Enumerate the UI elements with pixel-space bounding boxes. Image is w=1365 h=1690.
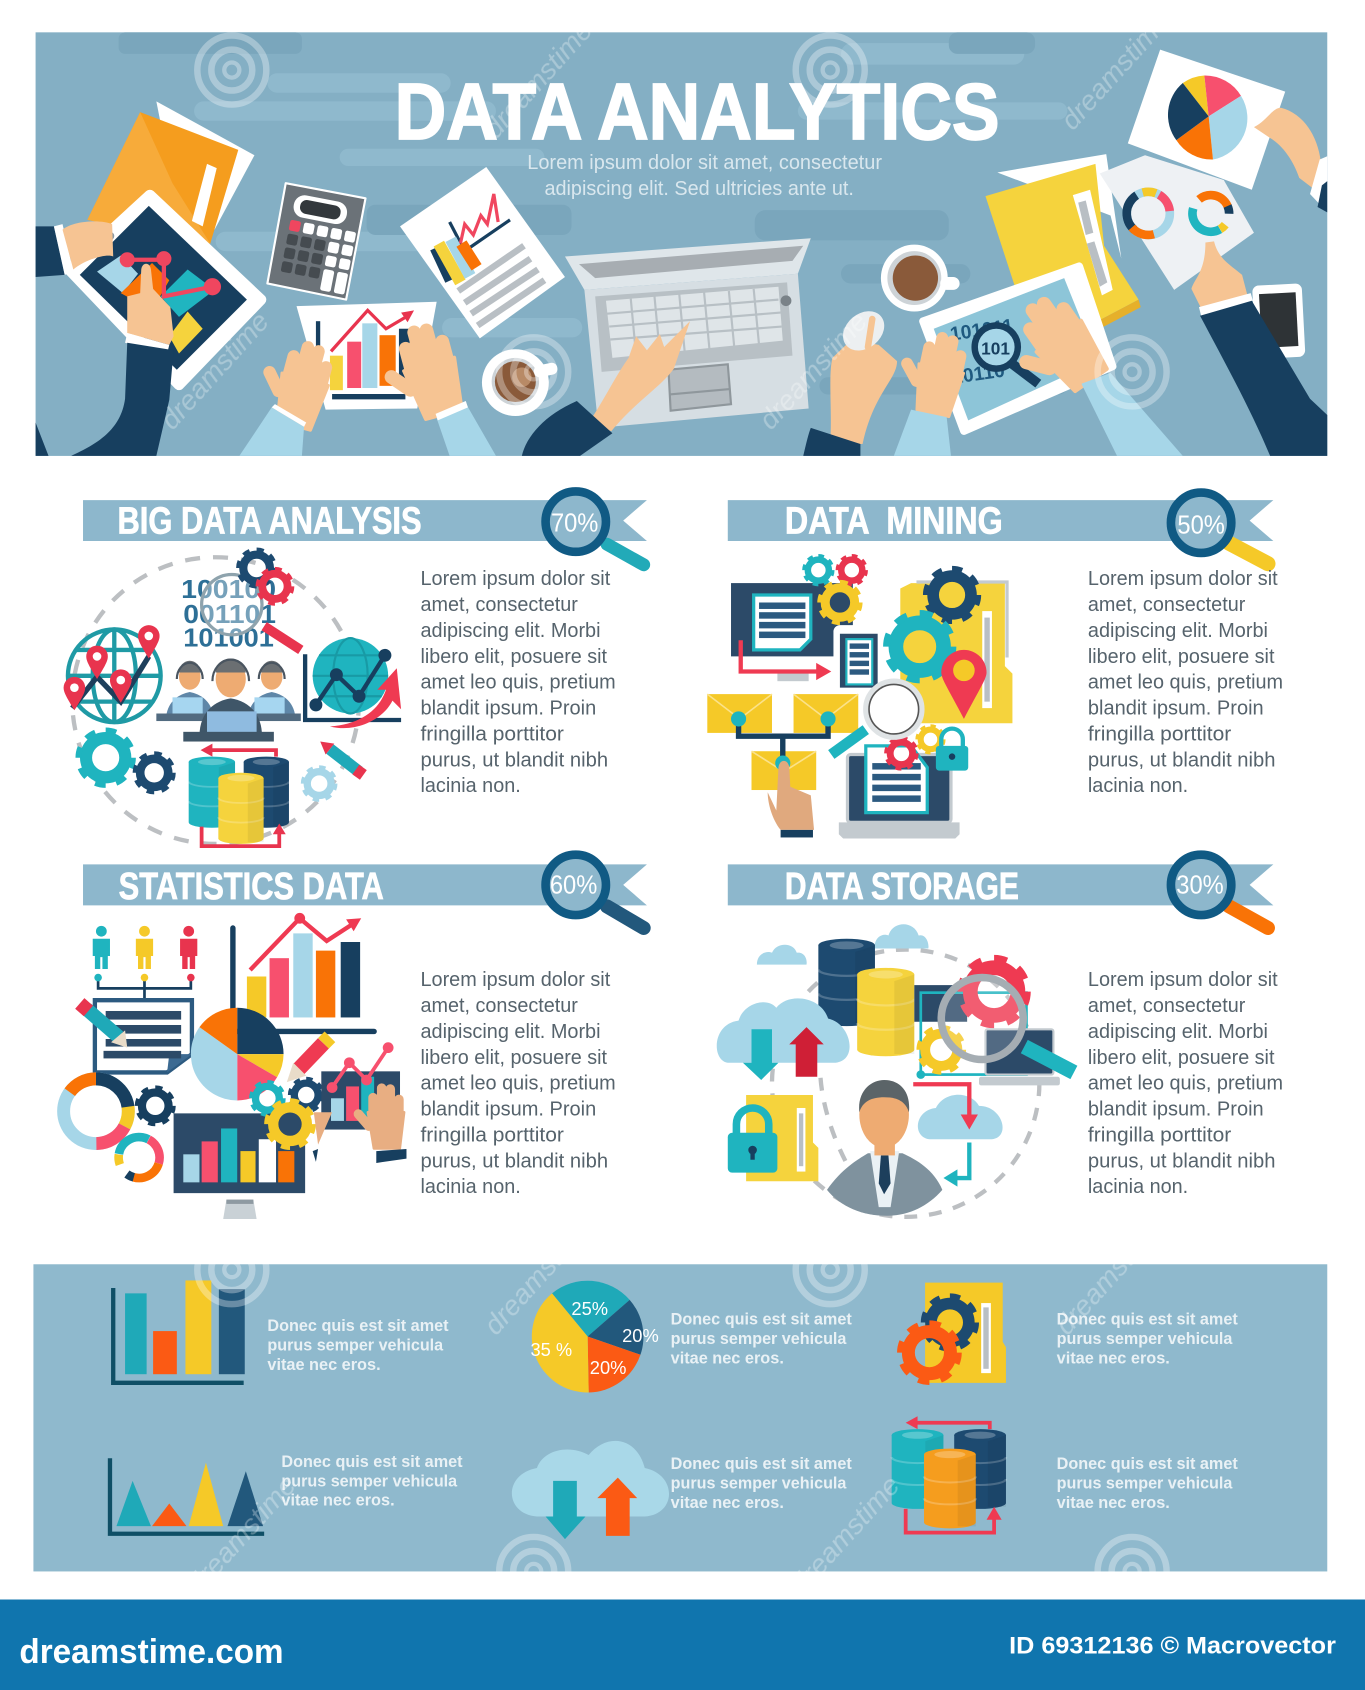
body text: data storage — [1088, 968, 1283, 1198]
panel: bottom statistics — [33, 1264, 1327, 1571]
body text: data mining: lacinia non. — [1088, 774, 1188, 797]
chart: pie with percentages: 35 % — [530, 1339, 572, 1360]
icon: red pencil — [287, 1037, 330, 1082]
illustration: data mining — [707, 556, 1012, 839]
pie chart — [191, 1008, 284, 1100]
watermark: dreamstime — [477, 15, 598, 144]
illustration: big data analysis: 100100 — [181, 576, 276, 604]
text block: triangles: purus semper vehicula — [281, 1472, 458, 1490]
icon: monitor bar chart — [174, 1113, 305, 1219]
body text: data storage: purus, ut blandit nibh — [1088, 1149, 1276, 1172]
icon: folder with gears and pin — [887, 569, 1012, 723]
body text: statistics data — [420, 968, 616, 1198]
body text: big data analysis: purus, ut blandit nibh — [420, 748, 608, 771]
panel: statistics data — [51, 855, 647, 1219]
icon: magnifier 50% — [1171, 493, 1268, 564]
icon: magnifier 70% — [546, 491, 644, 565]
icon: call centre agents — [156, 659, 301, 742]
heading ribbon: big data analysis — [83, 500, 647, 542]
panel: data storage — [717, 855, 1283, 1217]
body text: big data analysis: fringilla porttitor — [420, 722, 564, 745]
icon: donut chart paper — [1100, 155, 1254, 290]
text block: cloud — [671, 1455, 852, 1512]
icon: three people — [93, 926, 197, 1005]
icon: magnifier 50%: 50% — [1177, 512, 1225, 540]
body text: data storage: fringilla porttitor — [1088, 1123, 1231, 1146]
icon: pencil — [320, 742, 363, 775]
icon: document and pencil — [80, 1000, 192, 1072]
body text: data mining: Lorem ipsum dolor sit — [1088, 567, 1278, 590]
body text: statistics data: purus, ut blandit nibh — [420, 1149, 608, 1172]
text block: cloud: purus semper vehicula — [671, 1474, 847, 1492]
heading ribbon: data storage — [728, 864, 1273, 907]
icon: smartphone — [833, 625, 883, 705]
right hands, phone and sleeves — [1191, 108, 1327, 456]
icon: database stack — [892, 1416, 1006, 1533]
body text: data storage: Lorem ipsum dolor sit — [1088, 968, 1278, 991]
text block: pie — [671, 1311, 852, 1367]
icons: small clouds — [757, 924, 928, 965]
text block: folder — [1057, 1311, 1238, 1367]
body text: big data analysis — [420, 567, 616, 797]
icon: database stack — [189, 744, 289, 846]
icon: magnifier — [831, 681, 922, 754]
icon: right tablet and hands: 101011 — [949, 315, 1015, 346]
icon: right tablet and hands: 101 — [981, 339, 1010, 359]
icon: globe chart with red arrow — [305, 638, 401, 728]
chart: pie with percentages: 20% — [590, 1357, 626, 1378]
body text: statistics data: amet leo quis, pretium — [420, 1072, 616, 1095]
text block: bars — [267, 1317, 449, 1374]
text block: bars: vitae nec eros. — [267, 1356, 381, 1374]
watermark: dreamstime — [154, 306, 275, 435]
icon: gears and magnifier with laptop — [914, 959, 1074, 1085]
title: DATA ANALYTICS — [395, 67, 999, 156]
body text: big data analysis: blandit ipsum. Proin — [420, 697, 596, 720]
icon: laptop — [565, 238, 811, 428]
icon: magnifier 60%: 60% — [550, 872, 597, 900]
icon: folder with gears — [900, 1283, 1006, 1383]
body text: data mining — [1088, 567, 1283, 797]
footer logo text: dreamstime.com — [19, 1633, 284, 1671]
hero subtitle: Lorem ipsum dolor sit amet, consectetur — [527, 151, 882, 174]
text block: cloud: vitae nec eros. — [671, 1494, 784, 1512]
icon: bar chart paper with hands — [239, 302, 496, 456]
icon: laptop with document — [839, 726, 960, 839]
text block: database: purus semper vehicula — [1057, 1474, 1233, 1492]
icon: magnifier 30%: 30% — [1176, 872, 1224, 900]
illustration: big data analysis — [64, 550, 401, 846]
hero subtitle: adipiscing elit. Sed ultricies ante ut. — [544, 177, 854, 200]
icon: business man — [827, 1080, 942, 1216]
icon: calculator — [267, 183, 366, 300]
text block: folder: purus semper vehicula — [1057, 1330, 1233, 1348]
text block: triangles: vitae nec eros. — [281, 1492, 395, 1510]
body text: big data analysis: Lorem ipsum dolor sit — [420, 567, 611, 590]
body text: data mining: amet leo quis, pretium — [1088, 671, 1283, 694]
icon: pie chart paper — [1128, 50, 1285, 190]
illustration: data storage — [717, 924, 1074, 1217]
watermark: dreamstime — [752, 306, 873, 435]
donut charts and gear — [51, 1066, 174, 1185]
icon: envelopes — [707, 694, 858, 790]
bar chart — [233, 913, 374, 1031]
heading ribbon: statistics data: STATISTICS DATA — [119, 865, 384, 907]
heading ribbon: data mining — [728, 500, 1273, 542]
icon: pointing hand — [768, 761, 814, 837]
watermark: dreamstime — [477, 1211, 598, 1340]
body text: big data analysis: libero elit, posuere sit — [420, 645, 607, 668]
body text: data storage: adipiscing elit. Morbi — [1088, 1020, 1268, 1043]
chart: bars — [113, 1280, 245, 1383]
body text: big data analysis: adipiscing elit. Morbi — [420, 619, 601, 642]
icon: big cloud with arrows — [717, 998, 850, 1080]
icon: orange folder — [87, 101, 254, 244]
laptop hand and sleeve — [522, 321, 690, 456]
text block: folder: vitae nec eros. — [1057, 1349, 1170, 1367]
icon: report page — [400, 167, 565, 338]
icon: mouse and hand — [803, 303, 897, 456]
icon: right tablet and hands — [894, 266, 1183, 456]
body text: data storage: amet leo quis, pretium — [1088, 1072, 1283, 1095]
watermark: dreamstime — [1049, 1211, 1170, 1340]
heading ribbon: data storage: DATA STORAGE — [785, 865, 1019, 907]
body text: statistics data: blandit ipsum. Proin — [420, 1098, 596, 1121]
text block: bars: Donec quis est sit amet — [267, 1317, 449, 1335]
body text: statistics data: adipiscing elit. Morbi — [420, 1020, 601, 1043]
illustration: big data analysis: 101001 — [183, 625, 274, 653]
icon: coffee cup left — [482, 349, 558, 416]
body text: data storage: blandit ipsum. Proin — [1088, 1098, 1264, 1121]
icon: monitor with document — [731, 583, 853, 681]
text block: database — [1057, 1455, 1238, 1512]
body text: data mining: adipiscing elit. Morbi — [1088, 619, 1268, 642]
text block: pie: Donec quis est sit amet — [671, 1311, 852, 1329]
icon: globe with pins — [64, 625, 161, 722]
text block: folder: Donec quis est sit amet — [1057, 1311, 1238, 1329]
body text: statistics data: libero elit, posuere sit — [420, 1046, 607, 1069]
heading ribbon: big data analysis: BIG DATA ANALYSIS — [118, 500, 422, 542]
chart: pie with percentages: 20% — [622, 1325, 659, 1346]
body text: data mining: blandit ipsum. Proin — [1088, 697, 1264, 720]
chart: triangles — [110, 1458, 264, 1534]
left sleeves and hands — [36, 221, 174, 456]
text block: bars: purus semper vehicula — [267, 1336, 444, 1354]
text block: triangles — [281, 1453, 463, 1510]
text block: database: Donec quis est sit amet — [1057, 1455, 1238, 1473]
body text: data mining: purus, ut blandit nibh — [1088, 748, 1276, 771]
footer bar — [0, 1599, 1365, 1690]
footer credit: ID 69312136 © Macrovector — [1009, 1633, 1336, 1659]
icon: cloud with arrows — [512, 1441, 669, 1539]
heading ribbon: statistics data — [83, 864, 647, 907]
icon: coffee cup right — [881, 245, 960, 311]
icon: magnifier 30% — [1171, 855, 1268, 928]
body text: statistics data: lacinia non. — [420, 1175, 521, 1198]
body text: statistics data: amet, consectetur — [420, 994, 578, 1017]
watermark: dreamstime — [785, 1470, 906, 1599]
body text: data mining: libero elit, posuere sit — [1088, 645, 1275, 668]
icon: small cloud with arrows — [913, 1084, 1003, 1187]
panel: big data analysis — [64, 491, 647, 846]
text block: triangles: Donec quis est sit amet — [281, 1453, 463, 1471]
chart: pie with percentages: 25% — [571, 1298, 608, 1319]
icon: yellow folder — [985, 154, 1141, 328]
body text: data mining: fringilla porttitor — [1088, 722, 1231, 745]
heading ribbon: data mining: DATA MINING — [785, 500, 1003, 542]
icon: magnifier 70%: 70% — [551, 509, 598, 537]
watermark: dreamstime — [181, 1470, 302, 1599]
illustration: big data analysis: 001101 — [183, 601, 276, 629]
body text: data storage: lacinia non. — [1088, 1175, 1188, 1198]
body text: big data analysis: amet leo quis, pretium — [420, 671, 616, 694]
body text: statistics data: Lorem ipsum dolor sit — [420, 968, 611, 991]
text block: cloud: Donec quis est sit amet — [671, 1455, 852, 1473]
chart: pie with percentages — [530, 1281, 659, 1393]
body text: big data analysis: amet, consectetur — [420, 593, 578, 616]
icon: padlock — [936, 729, 968, 771]
body text: data mining: amet, consectetur — [1088, 593, 1245, 616]
body text: data storage: libero elit, posuere sit — [1088, 1046, 1275, 1069]
text block: pie: vitae nec eros. — [671, 1349, 784, 1367]
text block: pie: purus semper vehicula — [671, 1330, 847, 1348]
icon: folder and padlock — [728, 1095, 818, 1181]
body text: big data analysis: lacinia non. — [420, 774, 521, 797]
body text: data storage: amet, consectetur — [1088, 994, 1245, 1017]
icon: magnifier 60% — [546, 855, 644, 928]
hero subtitle — [527, 151, 882, 200]
hero banner — [36, 32, 1327, 456]
text block: database: vitae nec eros. — [1057, 1494, 1170, 1512]
body text: statistics data: fringilla porttitor — [420, 1123, 564, 1146]
watermark: dreamstime — [1054, 6, 1175, 136]
icon: tablet chart with hand — [313, 1042, 406, 1163]
panel: data mining — [707, 493, 1283, 839]
icon: databases — [818, 939, 914, 1056]
watermark — [154, 6, 1175, 1606]
icon: right tablet and hands: 10110 — [951, 360, 1006, 389]
icon: left tablet — [69, 195, 261, 385]
illustration: statistics data — [51, 913, 406, 1219]
